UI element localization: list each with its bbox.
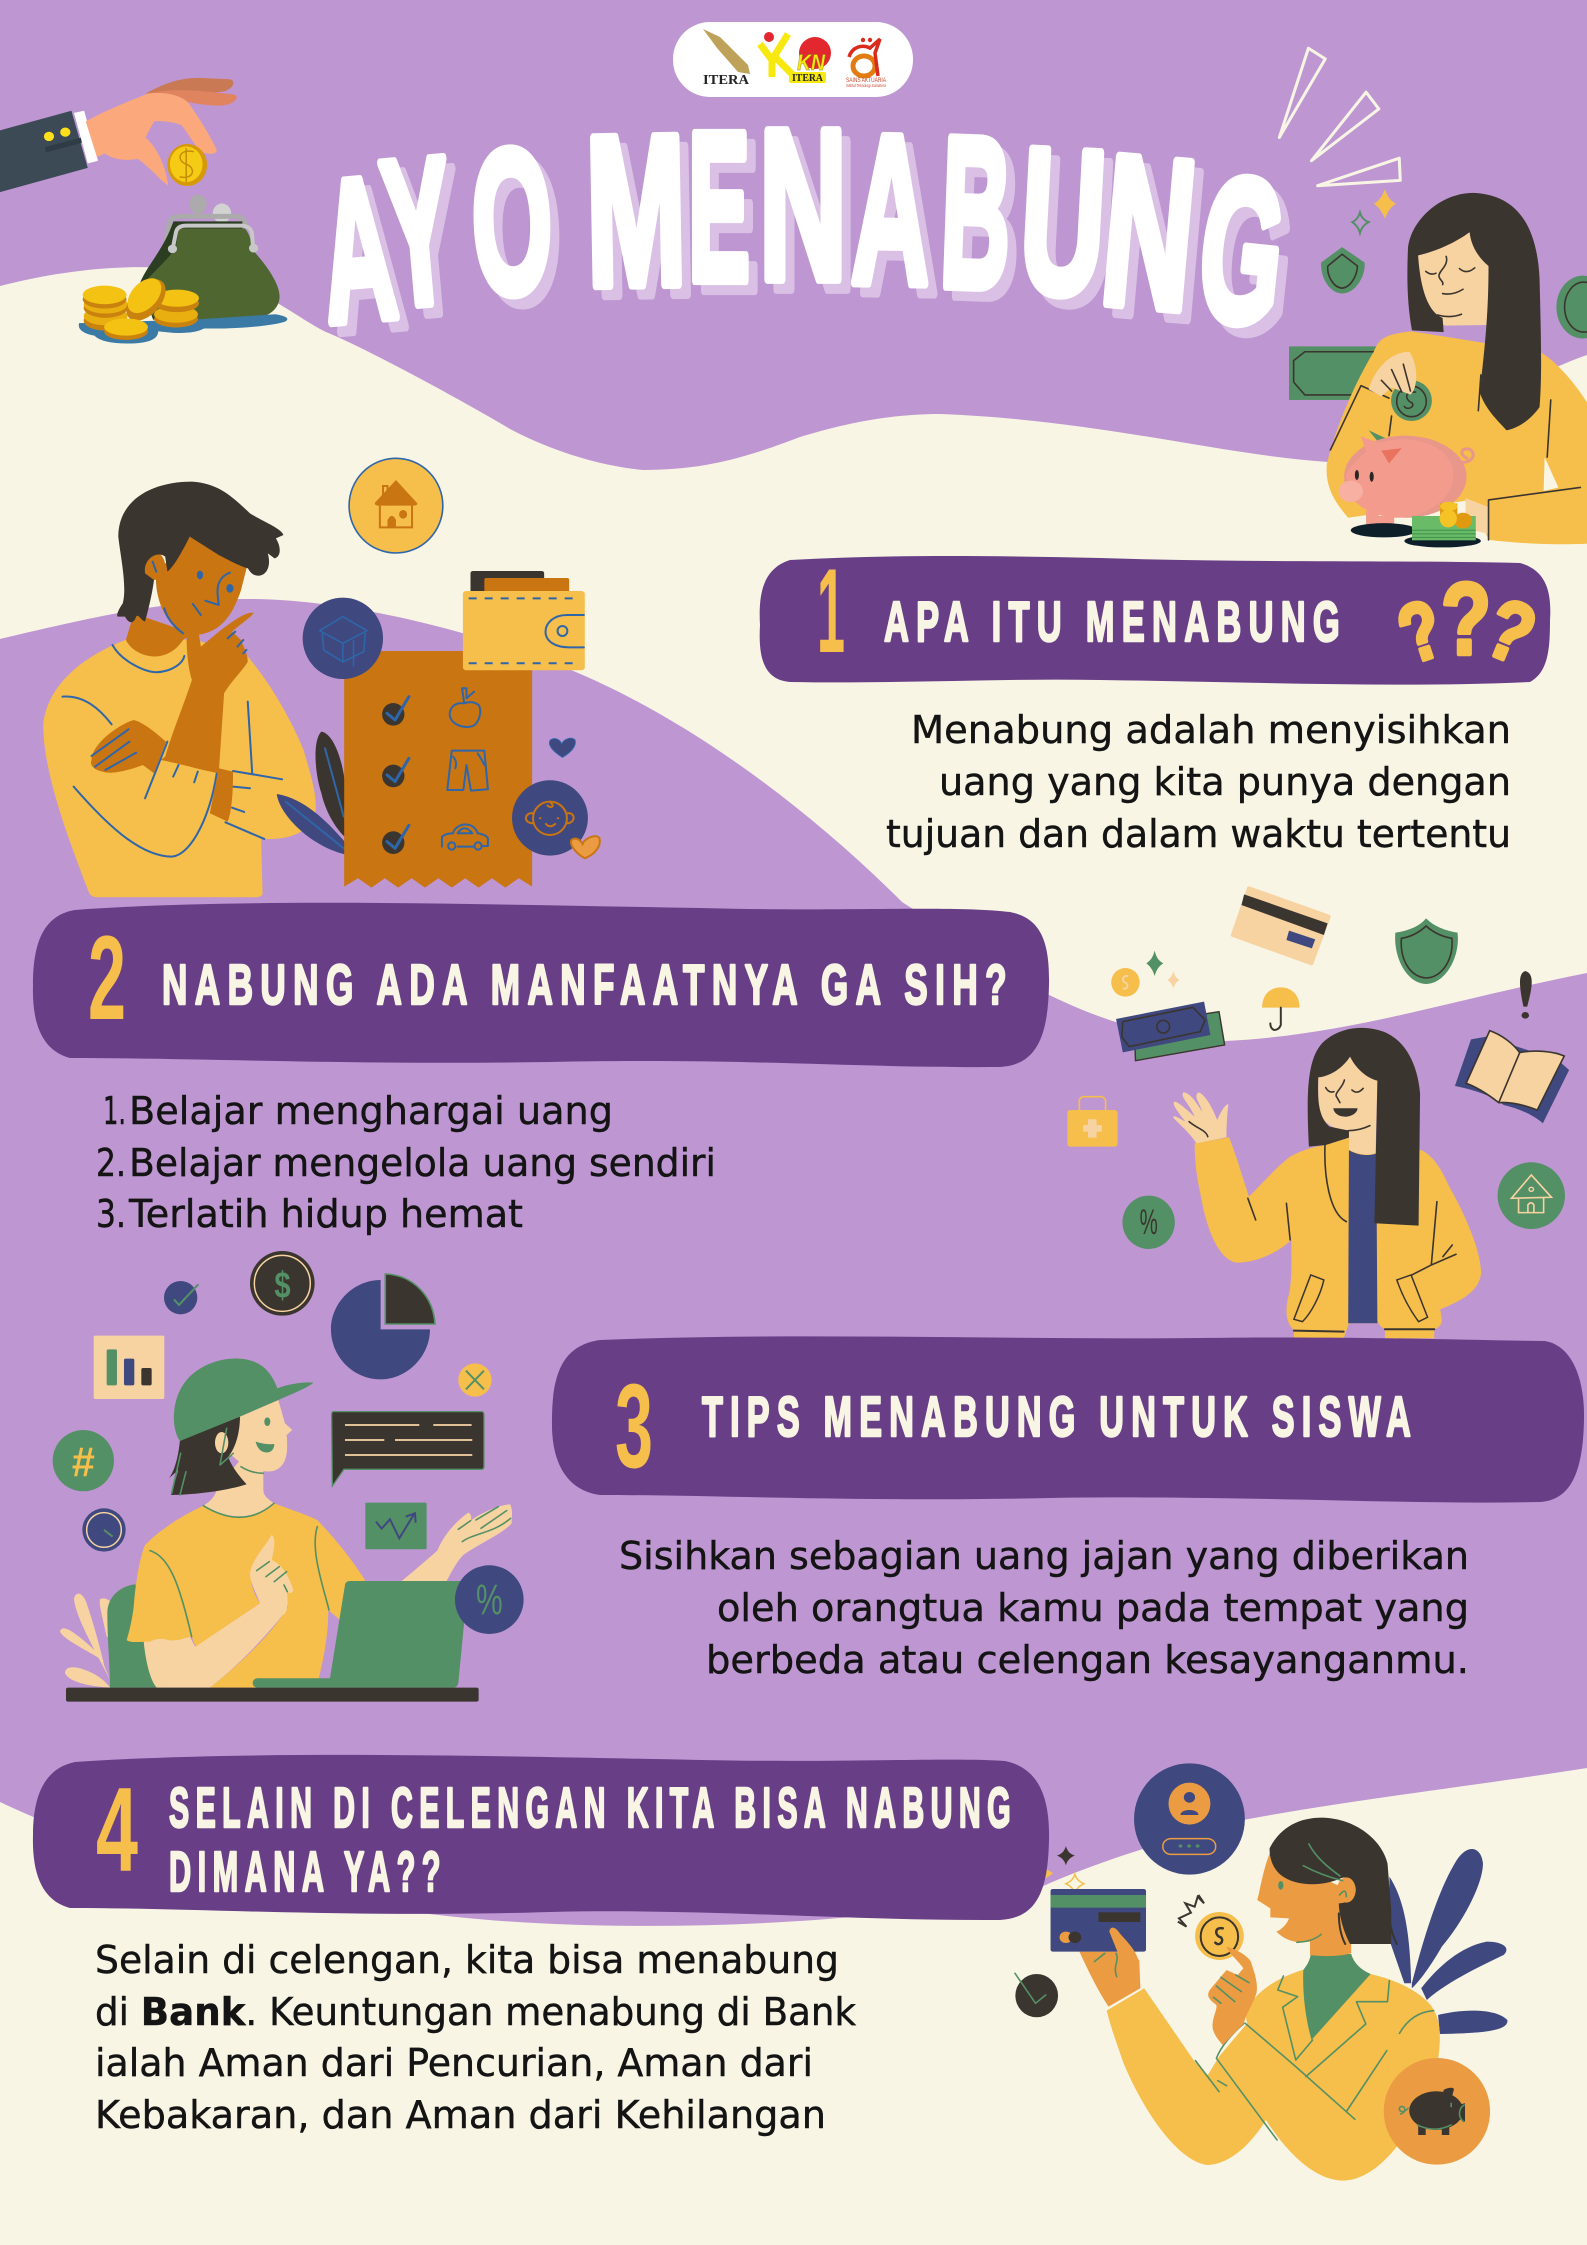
text block 3: berbeda atau celengan kesayanganmu.	[706, 1638, 1469, 1682]
icon: house bubble	[1498, 1162, 1565, 1229]
icon: speech bubble	[332, 1412, 484, 1486]
title: AYO MENABUNG: A	[312, 134, 404, 365]
banner 2	[33, 903, 1049, 1067]
woman: jacket	[1107, 1970, 1440, 2181]
hair	[1407, 193, 1541, 430]
face	[1418, 232, 1489, 326]
plant leaves	[1389, 1849, 1507, 2034]
coin stacks	[83, 275, 199, 340]
icon: dollar coin: $	[274, 1265, 291, 1306]
table	[66, 1688, 479, 1702]
heading 2: NABUNG ADA MANFAATNYA GA SIH?	[162, 953, 1014, 1017]
fingers	[145, 78, 233, 96]
girl	[1173, 1028, 1481, 1338]
illustration: girl with piggy bank	[1279, 48, 1587, 547]
icon: clock	[82, 1508, 126, 1552]
receipt icons	[442, 688, 488, 850]
icon: open book	[1455, 1031, 1569, 1123]
number 2: 2	[88, 911, 126, 1045]
text block 1	[886, 708, 1511, 856]
icon: account bubble	[1134, 1763, 1245, 1875]
logo pill	[673, 22, 913, 97]
baby bubble	[512, 780, 588, 856]
purse shadow	[79, 314, 287, 344]
thinking arm	[161, 613, 254, 773]
man hair	[117, 482, 283, 622]
title: AYO MENABUNG: N	[759, 86, 847, 326]
man shirt	[43, 638, 316, 897]
icon: x bubble	[458, 1363, 492, 1397]
banner 4: DIMANA YA??	[169, 1840, 447, 1904]
number 3: 3	[615, 1359, 653, 1493]
shield	[1321, 247, 1365, 294]
illustration: woman with card and coin	[1015, 1763, 1507, 2181]
title: AYO MENABUNG	[312, 86, 1295, 369]
illustration: thinking man with shopping list	[43, 458, 600, 897]
icon: check bubble	[164, 1281, 198, 1314]
plants and chair	[60, 1584, 163, 1688]
icon: percent bubble: %	[1140, 1203, 1158, 1243]
illustration: person with cap at laptop	[53, 1251, 524, 1702]
icon: percent bubble	[455, 1565, 524, 1634]
pointing hand	[250, 1535, 293, 1615]
text block 4: di Bank. Keuntungan menabung di Bank	[95, 1990, 856, 2034]
coin edge	[1556, 276, 1587, 339]
waving hand	[1173, 1092, 1228, 1143]
bank note	[1289, 346, 1391, 400]
left hand with card	[1079, 1952, 1140, 2007]
title: AYO MENABUNG: O	[468, 107, 556, 338]
icon: hash bubble	[53, 1430, 114, 1491]
woman: head	[1257, 1853, 1351, 1956]
logo: itera map	[703, 29, 750, 74]
icon: coin and sparkles	[1111, 951, 1180, 997]
text block 3: oleh orangtua kamu pada tempat yang	[717, 1586, 1469, 1630]
icon: umbrella	[1262, 987, 1300, 1030]
text block 2: benefits list: 1.	[103, 1089, 126, 1133]
icon: house bubble	[349, 458, 443, 553]
text block 4	[95, 1938, 856, 2137]
title: AYO MENABUNG: B	[937, 93, 1015, 334]
icon: hand dropping coin into purse	[0, 78, 287, 344]
banner 1	[760, 544, 1550, 685]
leaves	[316, 732, 345, 837]
cash and coins	[1351, 523, 1417, 537]
purse body	[140, 221, 245, 321]
illustration: waving girl with icons	[1067, 888, 1569, 1338]
icon: question marks	[1387, 561, 1548, 683]
icon: question marks: ?	[1441, 561, 1491, 676]
icon: question marks: ?	[1473, 580, 1548, 683]
icon: question marks: ?	[1387, 581, 1453, 681]
icon: pie chart	[331, 1274, 435, 1379]
body	[1327, 331, 1587, 544]
icon: percent bubble	[1122, 1196, 1175, 1249]
wallet	[463, 571, 585, 670]
icon: first aid kit	[1067, 1097, 1118, 1147]
coin and hand	[1391, 380, 1432, 421]
title: AYO MENABUNG: U	[1015, 106, 1111, 339]
banner 1: 1	[817, 544, 845, 678]
logo: aktuaria: Institut Teknologi Sumatera	[846, 83, 886, 88]
sparkle lines	[1279, 48, 1400, 186]
hand on arm	[91, 720, 166, 773]
icon: exclamation mark	[1520, 971, 1532, 1019]
text block 3: Sisihkan sebagian uang jajan yang diberikan	[619, 1534, 1469, 1578]
logo: kkn figure: ITERA	[792, 73, 824, 84]
hearts	[549, 738, 575, 757]
laptop	[253, 1581, 467, 1688]
background: top purple wave	[0, 0, 1587, 470]
text block 2: benefits list: Terlatih hidup hemat	[128, 1192, 523, 1236]
receipt checks	[382, 697, 409, 854]
title: AYO MENABUNG: E	[688, 88, 750, 325]
text block 1: tujuan dan dalam waktu tertentu	[886, 812, 1511, 856]
text block 1: Menabung adalah menyisihkan	[911, 708, 1511, 752]
banner 3	[552, 1336, 1584, 1503]
title: AYO MENABUNG: M	[584, 90, 688, 331]
title: AYO MENABUNG: A	[850, 91, 932, 329]
text block 2: benefits list: Belajar menghargai uang	[129, 1089, 613, 1133]
purse clasp	[189, 195, 207, 214]
icon: shield	[1395, 918, 1458, 984]
receipt	[344, 651, 532, 888]
text block 2: benefits list: 3.	[96, 1192, 126, 1236]
text block 2: benefits list	[96, 1089, 716, 1236]
logo: aktuaria	[846, 38, 886, 88]
icon: card	[1233, 888, 1329, 963]
person	[127, 1359, 512, 1688]
neck and face	[126, 613, 192, 656]
logo: kkn figure	[760, 32, 831, 84]
wrist	[1466, 498, 1489, 534]
piggy bank	[1369, 430, 1392, 443]
text block 1: uang yang kita punya dengan	[939, 760, 1511, 804]
title: AYO MENABUNG: Y	[374, 113, 462, 351]
credit card	[1051, 1889, 1146, 1952]
banner 4	[33, 1755, 1049, 1920]
coin and fingers	[1178, 1895, 1244, 1960]
text block 4: ialah Aman dari Pencurian, Aman dari	[95, 2041, 813, 2085]
sparkles	[1057, 1846, 1075, 1865]
logo: itera word: ITERA	[703, 73, 750, 88]
navy bubble box	[303, 598, 383, 679]
background: middle purple wave	[0, 599, 1587, 1926]
sleeve	[0, 111, 88, 192]
text block 4: Selain di celengan, kita bisa menabung	[95, 1938, 839, 1982]
icon: hash bubble: #	[72, 1440, 95, 1486]
icon: trend card	[365, 1503, 427, 1549]
number 4: 4	[96, 1763, 138, 1897]
title: AYO MENABUNG: N	[1094, 110, 1204, 356]
text block 4: Kebakaran, dan Aman dari Kehilangan	[95, 2093, 826, 2137]
title: AYO MENABUNG: G	[1189, 133, 1295, 369]
check bubble	[1015, 1973, 1058, 2017]
coin	[167, 144, 207, 186]
icon: bar chart	[94, 1336, 164, 1399]
logo: aktuaria: SAINS AKTUARIA	[846, 78, 886, 84]
woman: jacket lines	[1195, 1976, 1434, 2140]
icon: dollar coin	[250, 1251, 315, 1316]
icon: piggy bubble	[1384, 2058, 1490, 2165]
text block 3	[619, 1534, 1469, 1682]
icon: percent bubble: %	[476, 1577, 503, 1624]
icon: bank notes	[1116, 1002, 1225, 1061]
text block 2: benefits list: 2.	[96, 1141, 126, 1185]
text block 2: benefits list: Belajar mengelola uang sendiri	[129, 1141, 716, 1185]
logo: kkn figure: KN	[797, 50, 826, 75]
offered hand	[402, 1504, 512, 1581]
